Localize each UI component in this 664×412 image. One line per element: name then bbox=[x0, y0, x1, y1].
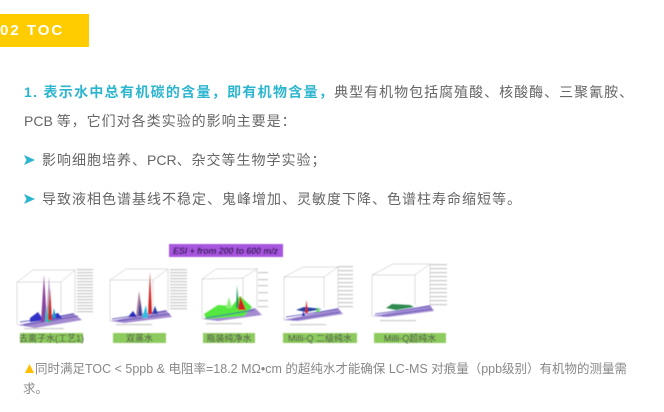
chart label: 去离子水: 去离子水(工艺1) bbox=[19, 332, 84, 344]
heading badge: 02 TOC bbox=[0, 14, 89, 47]
text block: TOC definition line 1: 1. 表示水中总有机碳的含量，即有机物含量，典型有机物包括腐殖酸、核酸酶、三聚氰胺、 bbox=[24, 84, 634, 100]
chart label: 双蒸水: 双蒸水 bbox=[126, 332, 153, 344]
chart title: ESI range: ESI + from 200 to 600 m/z bbox=[173, 246, 278, 256]
icon: arrow bullet 2 bbox=[24, 194, 35, 204]
icon: arrow bullet 1 bbox=[24, 155, 35, 165]
chart label: 瓶装纯净水: 瓶装纯净水 bbox=[206, 332, 252, 344]
chart label: Milli-Q超纯水: Milli-Q超纯水 bbox=[384, 332, 436, 344]
text block: bullet 2: 导致液相色谱基线不稳定、鬼峰增加、灵敏度下降、色谱柱寿命缩短等。 bbox=[42, 191, 522, 207]
text block: TOC definition line 2: PCB 等，它们对各类实验的影响主要是： bbox=[24, 113, 297, 129]
text block: footnote line 2: 求。 bbox=[23, 382, 48, 396]
chart label: Milli-Q 二级纯水: Milli-Q 二级纯水 bbox=[288, 332, 352, 344]
chart label: 双蒸水 bbox=[113, 332, 166, 344]
chart 1: deionized water bbox=[17, 269, 93, 329]
icon: yellow warning triangle bbox=[25, 364, 34, 373]
chart label: Milli-Q超纯水 bbox=[374, 332, 446, 344]
chart 2: double-distilled water bbox=[110, 269, 187, 325]
text block: bullet 1: 影响细胞培养、PCR、杂交等生物学实验； bbox=[42, 152, 327, 168]
chart 3: bottled pure water bbox=[202, 268, 268, 324]
chart 5: Milli-Q ultrapure water bbox=[372, 264, 447, 321]
chart 4: Milli-Q secondary pure water bbox=[283, 266, 353, 325]
text block: footnote line 1: 同时满足TOC < 5ppb & 电阻率=18.2 MΩ•cm 的超纯水才能确保 LC-MS 对痕量（ppb级别）有机物的测量需 bbox=[35, 362, 627, 376]
heading badge: 02 TOC: 02 TOC bbox=[0, 22, 64, 39]
